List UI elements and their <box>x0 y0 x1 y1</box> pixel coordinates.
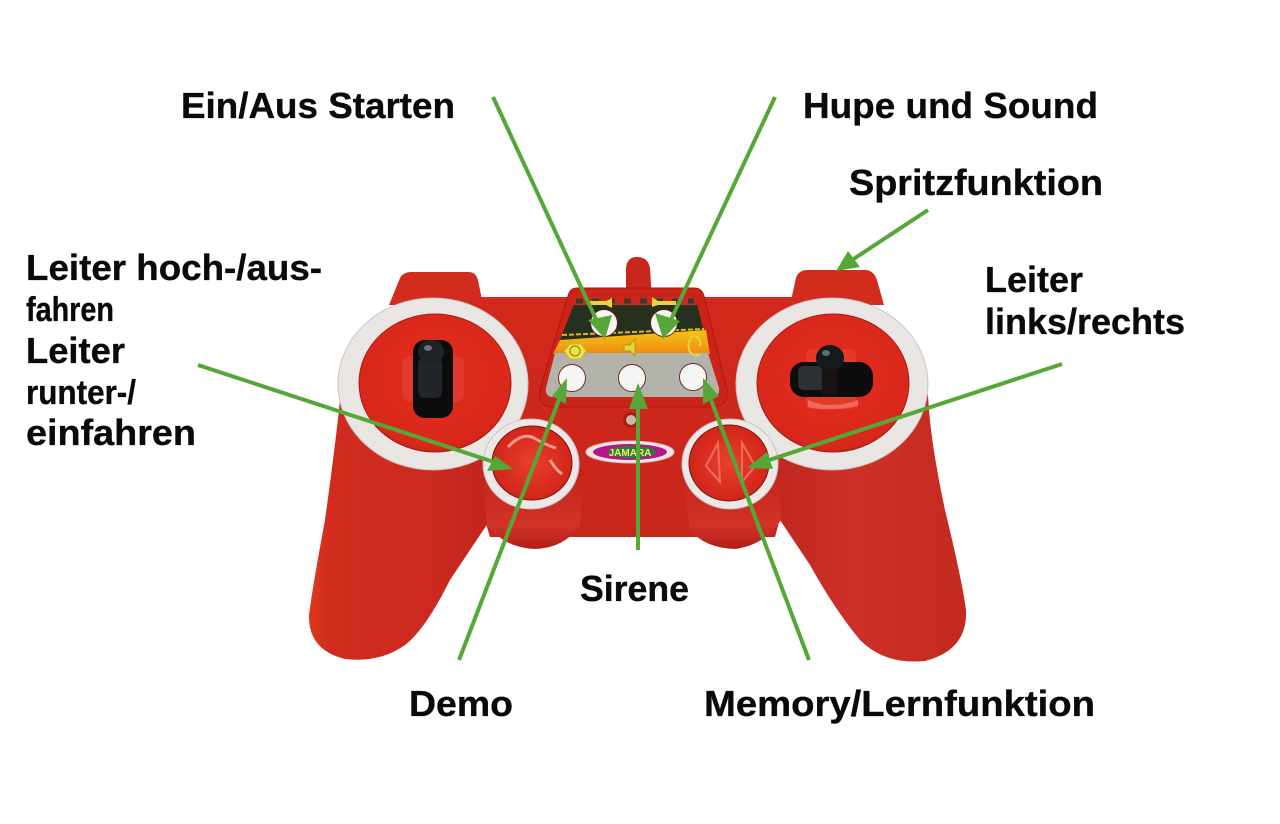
left small button housing <box>483 470 584 549</box>
arrow: Leiter hoch/runter <box>198 365 513 471</box>
left small button <box>483 419 579 509</box>
red hazard strip <box>572 297 697 305</box>
label: Leiter hoch/aus: Leiter <box>26 330 125 371</box>
right shoulder button <box>790 270 884 305</box>
label: Sirene: Sirene <box>580 568 689 609</box>
arrow: Sirene <box>629 383 648 550</box>
label: Leiter hoch/aus: runter-/ <box>26 374 137 412</box>
left joystick <box>402 340 464 418</box>
label: Leiter hoch/aus: einfahren <box>26 412 196 453</box>
dark upper panel <box>555 304 709 353</box>
arrow: Memory/Lernfunktion <box>703 378 809 660</box>
arrow: Demo <box>459 378 567 660</box>
label: Leiter hoch/aus <box>26 247 322 453</box>
brand logo <box>586 441 674 463</box>
icon: trumpet <box>652 297 676 307</box>
label: Leiter hoch/aus: fahren <box>26 291 114 329</box>
icon: memory loop <box>688 336 700 356</box>
brand logo: JAMARA <box>609 448 651 459</box>
right joystick ring <box>736 298 928 470</box>
icon: siren speaker <box>624 339 635 356</box>
indicator LED <box>623 412 639 428</box>
panel frame <box>540 288 727 407</box>
left joystick disc <box>359 314 511 452</box>
right grip <box>735 395 966 662</box>
label: Leiter links/rechts: Leiter <box>985 259 1083 300</box>
right small button housing <box>680 470 781 549</box>
white buttons <box>558 310 706 392</box>
left shoulder button <box>389 272 483 305</box>
icon: horn <box>590 298 612 308</box>
dashed yellow line <box>558 329 706 345</box>
grey lower panel <box>546 353 719 397</box>
label: Memory/Lernfunktion: Memory/Lernfunktion <box>704 683 1095 724</box>
right joystick <box>790 345 873 409</box>
orange band <box>553 330 710 354</box>
label: Leiter hoch/aus: Leiter hoch-/aus- <box>26 247 322 288</box>
arrow: Ein/Aus Starten <box>493 97 612 339</box>
arrows <box>198 97 1062 660</box>
label: Spritzfunktion: Spritzfunktion <box>849 162 1103 203</box>
arrow: Hupe und Sound <box>655 97 775 339</box>
right joystick disc <box>757 314 909 452</box>
left grip <box>309 400 528 660</box>
control panel <box>540 288 727 407</box>
label: Leiter links/rechts <box>985 259 1185 342</box>
controller centre body <box>470 297 810 537</box>
arrow: Leiter links/rechts <box>747 364 1062 469</box>
label: Hupe und Sound: Hupe und Sound <box>803 85 1098 126</box>
left joystick ring <box>338 298 528 470</box>
label: Leiter links/rechts: links/rechts <box>985 301 1185 342</box>
game controller <box>309 257 966 662</box>
label: Ein/Aus Starten: Ein/Aus Starten <box>181 85 455 126</box>
icon: power hexagon <box>564 344 586 359</box>
top antenna <box>626 257 652 300</box>
right small button <box>682 419 778 509</box>
label: Demo: Demo <box>409 683 513 724</box>
arrow: Spritzfunktion <box>836 210 928 271</box>
